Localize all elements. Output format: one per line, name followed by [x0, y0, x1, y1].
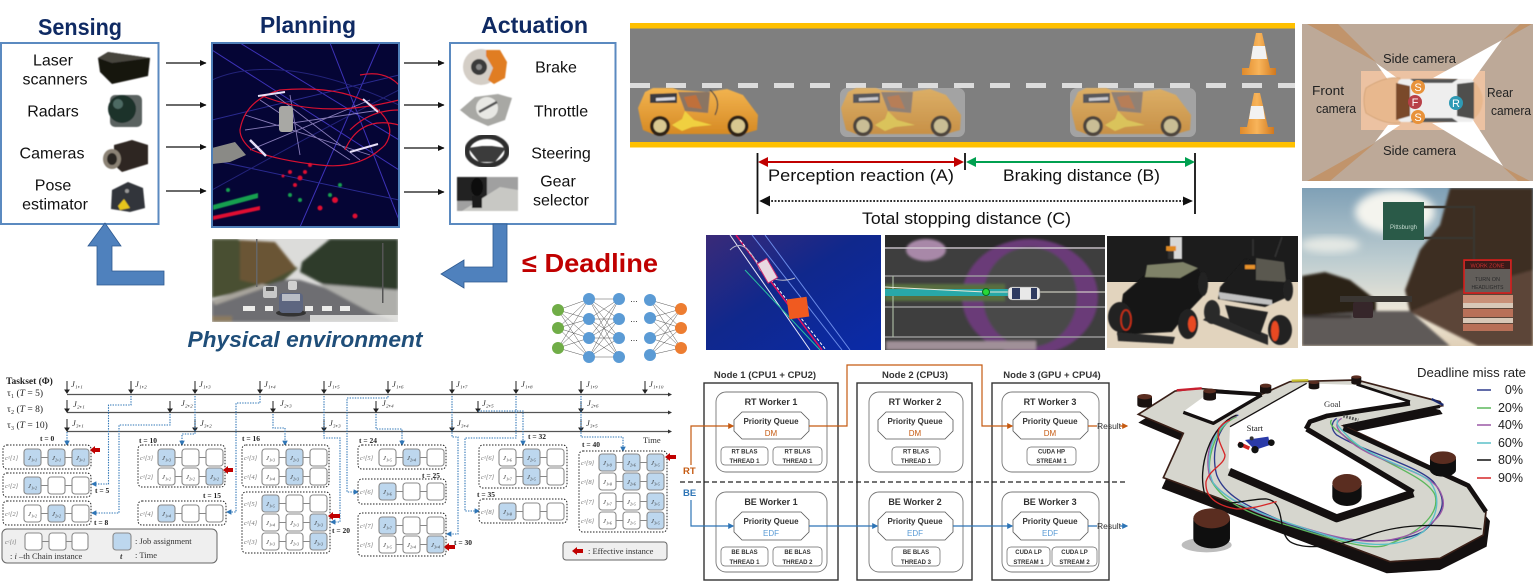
chain instance t=32: J₂,₅	[527, 455, 536, 462]
label: cameras: Cameras	[20, 146, 84, 163]
icon: S sensor bottom	[1411, 110, 1425, 124]
legend: deadline miss rate: 60%	[1498, 436, 1523, 450]
chain instance t=35: J₁,₈	[503, 509, 512, 516]
neural network: ...	[630, 294, 638, 304]
car: stop point	[1071, 88, 1191, 136]
node 1: THREAD 1	[729, 560, 760, 566]
chain instance t=32: J₁,₆	[503, 455, 512, 462]
panel: planning visualisation	[212, 43, 399, 227]
node 2: BE Worker 2	[888, 497, 942, 507]
node 1: RT Worker 1	[745, 397, 797, 407]
chain instance t=40: J₁,₉	[603, 460, 612, 467]
node 1: RT BLAS	[784, 450, 810, 456]
chain instance t=10: J₂,₂	[186, 474, 196, 481]
chain instance t=40: c¹[7]	[581, 499, 595, 506]
node 2: THREAD 1	[901, 459, 932, 465]
job labels: J₁,₇	[456, 379, 468, 389]
arrow: total stopping distance	[761, 200, 1192, 202]
chain instance t=20: J₃,₃	[314, 539, 323, 546]
marker: orange obstacle	[787, 297, 809, 319]
node 3: DM	[1044, 429, 1057, 438]
chain instance t=25: c¹[6]	[360, 489, 374, 496]
heading: Sensing: Sensing	[38, 14, 122, 40]
chain instance t=40: J₂,₅	[627, 499, 636, 506]
job labels: J₃,₄	[457, 418, 469, 428]
label: rear camera: camera	[1491, 103, 1532, 118]
label: selector: selector	[533, 193, 590, 210]
panel: sensing	[1, 43, 158, 224]
label: tau 3: τ₃ (T = 10)	[7, 420, 48, 431]
label: RT: RT	[683, 466, 696, 477]
chain instance t=32: J₁,₇	[503, 474, 513, 481]
chain instance t=24: J₂,₄	[407, 455, 417, 462]
job labels: J₃,₁	[72, 418, 84, 428]
chain instance t=30: J₁,₇	[383, 523, 393, 530]
road illustration	[630, 23, 1295, 148]
node 3: BE Worker 3	[1023, 497, 1077, 507]
chain instance t=24: J₁,₅	[383, 455, 392, 462]
icon: S sensor top	[1411, 80, 1425, 94]
job labels: J₁,₉	[586, 379, 598, 389]
arrows: sensing to planning	[166, 63, 206, 191]
chain instance t=20: c¹[4]	[244, 520, 258, 527]
node 1: BE BLAS	[784, 550, 811, 556]
chain instance t=32	[479, 445, 567, 488]
node 3: Priority Queue	[1022, 517, 1078, 526]
job labels: J₃,₃	[329, 418, 341, 428]
flow: BE path	[691, 500, 1127, 531]
panel: node scheduling diagram	[680, 365, 1127, 580]
chain instance t=30: J₃,₄	[431, 542, 441, 549]
chain instance t=8: J₁,₂	[28, 511, 38, 518]
small infield	[1183, 393, 1262, 423]
legend: effective instance: : Effective instance	[588, 546, 654, 556]
label: perception reaction: Perception reaction (A)	[768, 166, 954, 185]
legend: job assignment: cᶜ[i]	[5, 539, 17, 546]
icon: F sensor: F	[1412, 97, 1419, 109]
icon: kart	[1238, 436, 1275, 453]
chain instance t=32: c¹[6]	[481, 455, 495, 462]
label: brake: Brake	[535, 60, 577, 77]
node 1: Priority Queue	[743, 517, 799, 526]
overpass bridge	[1340, 296, 1412, 302]
node 1: Node 1 (CPU1 + CPU2)	[714, 370, 816, 381]
label: rear: Rear	[1487, 85, 1514, 100]
job labels: J₁,₈	[521, 379, 533, 389]
node 1: EDF	[763, 529, 779, 538]
node 1: THREAD 1	[782, 459, 813, 465]
time stamps: t = 40	[582, 440, 600, 449]
chain instance t=40: c¹[6]	[581, 518, 595, 525]
label: total stopping distance: Total stopping distance (C)	[862, 209, 1071, 228]
icon: lower cone	[1240, 93, 1274, 134]
legend: deadline miss rate: 80%	[1498, 453, 1523, 467]
chain instance t=40: J₁,₆	[603, 518, 612, 525]
legend: deadline miss rate	[1417, 365, 1526, 485]
node 2: BE BLAS	[903, 550, 929, 556]
panel: taskset timeline	[2, 376, 676, 563]
chain instance t=10: J₁,₃	[162, 455, 171, 462]
chain instance t=0: c¹[1]	[5, 455, 19, 462]
chain instance t=24	[358, 445, 446, 469]
node 1: BE Worker 1	[744, 497, 798, 507]
finish line	[1343, 416, 1358, 420]
chain instance t=10: J₃,₂	[210, 474, 220, 481]
label: estimator: estimator	[22, 197, 89, 214]
time stamps: t = 25	[422, 471, 440, 480]
arrow: braking distance	[968, 161, 1193, 163]
obstacles: cylinders	[1137, 375, 1456, 548]
time stamps: t = 8	[94, 518, 109, 527]
chain instance t=10: c¹[2]	[140, 474, 154, 481]
icon: S sensor bottom: S	[1414, 112, 1422, 124]
chain instance t=35: c¹[8]	[481, 509, 495, 516]
time stamps: t = 0	[40, 434, 55, 443]
chain instance t=20	[242, 492, 330, 553]
job labels: J₁,₄	[264, 379, 276, 389]
icon: car top view	[1364, 78, 1483, 123]
node 1: Priority Queue	[743, 417, 799, 426]
time stamps: t = 15	[203, 491, 221, 500]
chain instance t=10: c¹[3]	[140, 455, 154, 462]
icon: laser scanner	[98, 52, 150, 84]
chain instance t=40: J₂,₆	[627, 460, 636, 467]
node 3: STREAM 1	[1036, 459, 1067, 465]
chain instance t=40: J₃,₅	[651, 479, 660, 486]
chain instance t=0	[3, 445, 91, 469]
node 2	[857, 370, 972, 580]
time stamps: t = 16	[242, 434, 260, 443]
job labels: J₂,₁	[73, 399, 85, 409]
chain instance t=5	[3, 473, 91, 497]
ghost panel: stopped	[1070, 88, 1196, 137]
chain instance t=20: J₃,₃	[314, 520, 323, 527]
label: tau 1: τ₁ (T = 5)	[7, 388, 43, 399]
coloured track sections	[1177, 380, 1443, 405]
job labels: J₃,₅	[586, 418, 598, 428]
job labels: J₂,₅	[482, 398, 494, 408]
label: laser scanners: Laser	[33, 53, 74, 70]
job labels: J₁,₃	[199, 379, 211, 389]
chain instance t=40: c¹[8]	[581, 479, 595, 486]
chain instance t=10: J₁,₂	[162, 474, 172, 481]
legend: job assignment: t	[120, 551, 123, 561]
icon: upper cone	[1242, 33, 1276, 75]
chain connectors	[67, 396, 623, 534]
chain instance t=35	[479, 499, 567, 523]
chain instance t=20: J₂,₃	[290, 539, 299, 546]
icon: radar	[108, 95, 142, 127]
chain instance t=40: J₂,₆	[627, 479, 636, 486]
label: start: Start	[1247, 423, 1264, 433]
node 3: STREAM 2	[1059, 560, 1090, 566]
label: steering: Steering	[531, 146, 591, 163]
chain instance t=8	[3, 501, 91, 525]
photo: highway work zone	[1300, 188, 1533, 346]
job labels: J₂,₄	[382, 398, 394, 408]
photo: scale robot cars	[1107, 236, 1298, 350]
chain instance t=8: J₂,₂	[52, 511, 62, 518]
job labels: J₁,₁₀	[649, 379, 664, 389]
chain instance t=30	[358, 513, 446, 556]
node 2: EDF	[907, 529, 923, 538]
inner walls	[1183, 383, 1486, 518]
icon: F sensor	[1408, 95, 1422, 109]
label: braking distance: Braking distance (B)	[1003, 166, 1160, 185]
divider: RT and BE	[680, 481, 1127, 483]
job labels: J₁,₅	[328, 379, 340, 389]
heading: Planning: Planning	[260, 12, 356, 38]
chain instance t=40: J₃,₅	[651, 460, 660, 467]
chain instance t=0: J₃,₁	[76, 455, 85, 462]
robot car left	[1108, 237, 1208, 344]
ghost panel: braking start	[840, 88, 965, 137]
node 2: Priority Queue	[887, 417, 943, 426]
label: time: Time	[643, 435, 661, 445]
node 2: THREAD 3	[901, 560, 932, 566]
node 3: CUDA HP	[1038, 450, 1065, 456]
car: perception point	[841, 88, 961, 136]
chain instance t=30: c¹[5]	[360, 542, 374, 549]
chain instance t=32: c¹[7]	[481, 474, 495, 481]
chain instance t=16: J₁,₄	[266, 474, 276, 481]
marker: green waypoint	[982, 288, 990, 296]
flow: RT path	[691, 365, 1127, 465]
caption: physical environment: Physical environment	[188, 327, 424, 352]
node 3: Node 3 (GPU + CPU4)	[1003, 370, 1101, 381]
chain instance t=0: J₁,₁	[28, 455, 37, 462]
legend: deadline miss rate: 90%	[1498, 471, 1523, 485]
car: initial position	[638, 88, 758, 136]
node 2: Node 2 (CPU3)	[882, 370, 948, 381]
chain instance t=20: J₂,₃	[290, 520, 299, 527]
legend: deadline miss rate: 40%	[1498, 418, 1523, 432]
job labels: J₃,₂	[200, 418, 212, 428]
time stamps: t = 10	[139, 436, 157, 445]
icon: gear selector	[457, 177, 518, 211]
chain instance t=20: c¹[5]	[244, 501, 258, 508]
trajectories	[1203, 415, 1482, 547]
chain instance t=40: J₁,₈	[603, 479, 612, 486]
label: scanners: scanners	[23, 72, 87, 89]
chain instance t=40: J₃,₅	[651, 499, 660, 506]
infield	[1228, 383, 1413, 515]
time axes	[67, 392, 672, 434]
chain instance t=16: J₁,₃	[266, 455, 275, 462]
chain instance t=32: J₂,₅	[527, 474, 536, 481]
chain instance t=25	[358, 479, 446, 504]
chain instance t=15: c¹[4]	[140, 511, 154, 518]
panel: actuation	[450, 43, 616, 224]
deadline callout: ≤ Deadline	[522, 248, 658, 278]
node 3: RT Worker 3	[1024, 397, 1076, 407]
effective instance arrows	[90, 446, 676, 551]
arrows: planning to actuation	[404, 63, 444, 192]
icon: steering wheel	[467, 136, 507, 166]
heading: Actuation: Actuation	[481, 12, 588, 38]
icon: pose estimator	[111, 182, 145, 212]
label: gear: Gear	[540, 174, 576, 191]
label: goal: Goal	[1324, 399, 1341, 409]
node 3: STREAM 1	[1013, 560, 1044, 566]
node 1	[704, 370, 838, 580]
barricade	[1463, 295, 1513, 331]
legend: deadline miss rate: 0%	[1505, 383, 1523, 397]
node 1: RT BLAS	[732, 450, 758, 456]
chain instance t=20: J₁,₅	[266, 501, 275, 508]
label: side camera bottom: Side camera	[1383, 143, 1457, 158]
chain instance t=20: c¹[3]	[244, 539, 258, 546]
time stamps: t = 35	[477, 490, 495, 499]
node 2: Priority Queue	[887, 517, 943, 526]
chain instance t=16: c¹[4]	[244, 474, 258, 481]
chain instance t=40: J₁,₇	[603, 499, 613, 506]
chain instance t=30: J₂,₄	[407, 542, 417, 549]
node 1: BE BLAS	[731, 550, 758, 556]
chain instance t=16: J₂,₃	[290, 455, 299, 462]
arrow: actuation to environment	[441, 224, 507, 288]
chain instance t=16	[242, 445, 329, 487]
label: side camera top: Side camera	[1383, 51, 1457, 66]
photo: lidar costmap	[885, 235, 1105, 355]
job labels: J₂,₃	[280, 398, 292, 408]
chain instance t=16: J₂,₃	[290, 474, 299, 481]
sign: work zone highlighted: HEADLIGHTS	[1472, 285, 1504, 291]
border: planning image	[212, 43, 399, 227]
panel: race track with trajectories	[1137, 375, 1490, 573]
icon: nearby car	[212, 142, 246, 164]
wedge: side camera views	[1375, 63, 1400, 142]
icon: ego vehicle	[279, 106, 293, 132]
release arrows	[65, 381, 647, 431]
heading: taskset: Taskset (Φ)	[6, 376, 53, 387]
flow: RT path: Result	[1097, 421, 1122, 431]
job labels: J₂,₆	[587, 398, 599, 408]
node 3: CUDA LP	[1015, 550, 1042, 556]
icon: throttle	[460, 94, 512, 126]
sign: overhead green	[1383, 202, 1474, 262]
node 3	[992, 370, 1109, 580]
chain instance t=5: J₁,₂	[28, 483, 38, 490]
chain instance t=25: J₁,₆	[383, 489, 392, 496]
legend: effective instance	[563, 542, 667, 560]
chain instance t=20: J₁,₄	[266, 520, 276, 527]
node 2: DM	[909, 429, 922, 438]
job labels: J₁,₂	[135, 379, 147, 389]
neural network: ...	[630, 314, 638, 324]
node 3: Priority Queue	[1022, 417, 1078, 426]
node 1: DM	[765, 429, 778, 438]
icon: R sensor: R	[1452, 98, 1460, 110]
node 2: RT BLAS	[903, 450, 929, 456]
job labels	[71, 379, 664, 428]
label: BE: BE	[683, 488, 696, 499]
sign: work zone highlighted: WORK ZONE	[1471, 264, 1505, 270]
node 3: EDF	[1042, 529, 1058, 538]
chain instance t=30: J₁,₅	[383, 542, 392, 549]
chain instance t=15: J₁,₄	[162, 511, 172, 518]
node 1: THREAD 1	[729, 459, 760, 465]
sign: overhead green: Pittsburgh	[1390, 225, 1417, 231]
icon: camera	[103, 140, 148, 172]
time stamps: t = 5	[95, 486, 110, 495]
time stamps: t = 30	[454, 538, 472, 547]
chain instance t=40: J₃,₅	[651, 518, 660, 525]
chain instance t=20: J₁,₃	[266, 539, 275, 546]
label: front camera: camera	[1316, 101, 1357, 116]
label: radars: Radars	[27, 104, 79, 121]
neural network: ...	[630, 333, 638, 343]
chain instance t=40: c¹[9]	[581, 460, 595, 467]
robot car right	[1203, 237, 1293, 345]
job labels: J₂,₂	[181, 398, 193, 408]
node 3: CUDA LP	[1061, 550, 1088, 556]
arrow: perception reaction	[760, 161, 962, 163]
chain instance t=16: c¹[3]	[244, 455, 258, 462]
time stamps: t = 24	[359, 436, 377, 445]
label: front: Front	[1312, 83, 1344, 98]
sign: work zone highlighted	[1464, 260, 1511, 293]
chain instance t=15	[138, 501, 226, 525]
label: pose: Pose	[35, 178, 71, 195]
chain instance t=24: c¹[5]	[360, 455, 374, 462]
sign: work zone highlighted: TURN ON	[1475, 277, 1500, 283]
chain instance t=40: J₂,₅	[627, 518, 636, 525]
legend: deadline miss rate: 20%	[1498, 401, 1523, 415]
chain instance t=30: c¹[7]	[360, 523, 374, 530]
legend: job assignment: : i –th Chain instance	[10, 551, 82, 561]
track walls	[1138, 388, 1490, 573]
arrow: environment to sensing	[88, 223, 164, 285]
flow: BE path: Result	[1097, 521, 1122, 531]
time stamps: t = 20	[332, 526, 350, 535]
legend: job assignment: : Job assignment	[135, 536, 192, 546]
icon: vehicle on costmap	[1008, 287, 1040, 300]
panel: camera layout	[1302, 24, 1533, 181]
label: tau 2: τ₂ (T = 8)	[7, 404, 43, 415]
legend: job assignment	[2, 529, 217, 563]
vehicle ahead	[1353, 302, 1373, 318]
time stamps: t = 32	[528, 432, 546, 441]
track shadows	[1182, 496, 1353, 552]
legend: deadline miss rate: Deadline miss rate	[1417, 365, 1526, 380]
icon: S sensor top: S	[1414, 82, 1422, 94]
chain instance t=40	[579, 451, 667, 532]
chain instance t=8: c¹[2]	[5, 511, 19, 518]
neural network	[552, 293, 687, 363]
legend: job assignment: : Time	[135, 550, 157, 560]
chain instance t=0: J₂,₁	[52, 455, 61, 462]
chain instance t=10	[138, 445, 225, 487]
node 2: RT Worker 2	[889, 397, 941, 407]
photo: street scene	[212, 239, 398, 322]
photo: simulator blue view	[706, 235, 881, 350]
icon: R sensor	[1449, 96, 1463, 110]
stopping distance diagram	[758, 153, 1195, 228]
chain instance t=5: c¹[2]	[5, 483, 19, 490]
time stamps	[40, 432, 600, 547]
wedge: rear camera view	[1432, 40, 1503, 166]
track surface	[1138, 380, 1486, 562]
icon: brake	[463, 49, 507, 85]
node 1: THREAD 2	[782, 560, 813, 566]
label: throttle: Throttle	[534, 104, 588, 121]
job labels: J₁,₆	[392, 379, 404, 389]
job labels: J₁,₁	[71, 379, 83, 389]
